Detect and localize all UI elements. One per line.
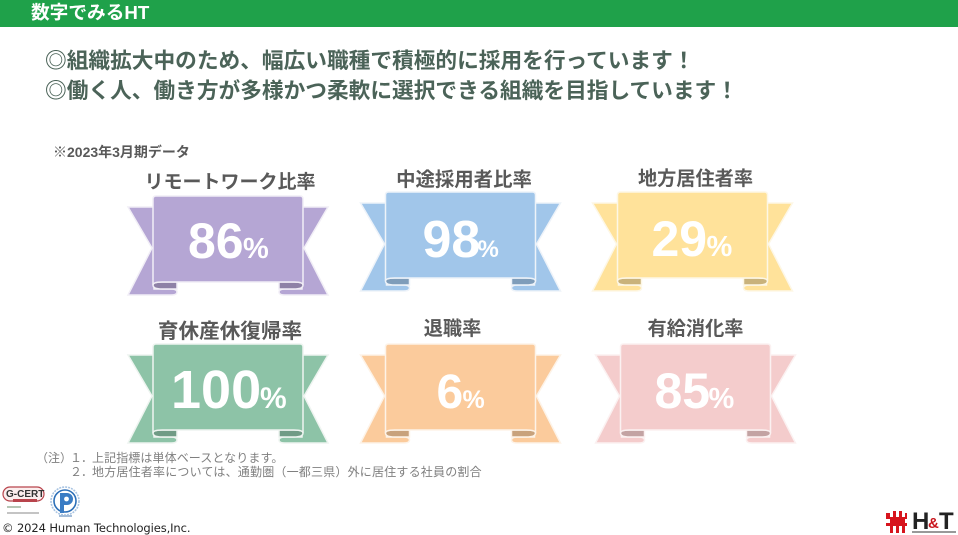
ribbon: turnover 6%: 6 [436,366,463,419]
footnote number 1: １． [70,451,92,465]
ribbon: mid-career 98%: 98 [422,211,480,269]
copyright: © 2024 Human Technologies,Inc. [2,521,190,535]
icon: H&T logo: & [928,515,939,532]
headline message 1: ◎組織拡大中のため、幅広い職種で積極的に採用を行っています！ [45,48,695,73]
ribbon: regional residents 29%: % [706,231,732,263]
title: 数字でみるHT [31,2,149,23]
ribbon: regional residents 29% [592,192,792,291]
icon: G-CERT badge: G-CERT [6,489,44,500]
ribbon: turnover 6%: % [462,386,485,414]
ribbon: parental leave return 100% [128,344,328,443]
footnote 2: 地方居住者率については、通勤圏（一都三県）外に居住する社員の割合 [92,465,482,479]
ribbon: paid leave 85%: % [708,383,734,415]
ribbon: mid-career 98%: % [478,236,499,263]
label: mid-career hire ratio: 中途採用者比率 [396,169,532,191]
ribbon: remote work 86% [128,196,328,295]
data period note: ※2023年3月期データ [53,144,190,160]
header band [0,0,958,27]
ribbon: remote work 86%: % [243,233,269,265]
footnote 1: 上記指標は単体ベースとなります。 [92,451,283,465]
label: remote work ratio: リモートワーク比率 [144,172,316,193]
label: turnover ratio: 退職率 [424,319,481,340]
ribbon: parental leave return 100%: 100 [171,360,261,420]
ribbon: parental leave return 100%: % [260,382,287,415]
ribbon: paid leave 85% [596,344,796,443]
ribbon: paid leave 85%: 85 [654,363,710,419]
ribbon: turnover 6% [360,344,560,443]
label: parental leave return ratio: 育休産休復帰率 [158,320,302,343]
ribbon: mid-career 98% [360,192,560,291]
icon: privacy mark [50,486,80,517]
label: regional residents ratio: 地方居住者率 [638,169,753,190]
icon: H&T logo: T [939,508,954,535]
headline message 2: ◎働く人、働き方が多様かつ柔軟に選択できる組織を目指しています！ [45,78,738,103]
icon: G-CERT badge [2,486,45,514]
footnote number 2: ２． [70,465,92,479]
label: paid leave usage ratio: 有給消化率 [648,319,743,340]
icon: H&T logo: H [912,508,929,535]
icon: H&T logo [886,508,956,535]
ribbon: regional residents 29%: 29 [652,211,707,267]
footnote prefix: （注） [36,451,72,465]
ribbon: remote work 86%: 86 [188,213,244,269]
